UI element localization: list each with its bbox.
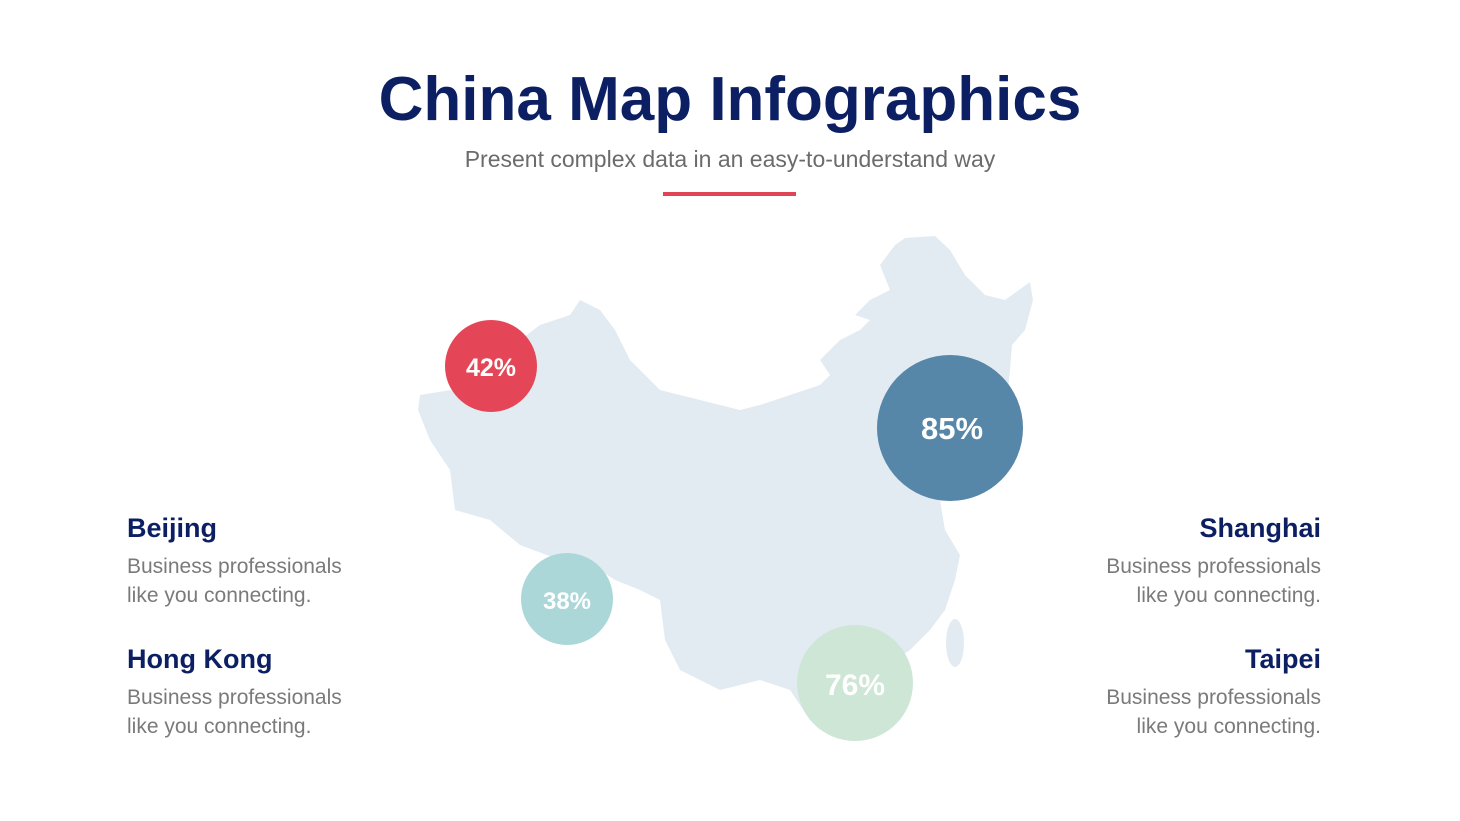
text: Taipei (1106, 644, 1321, 738)
circle 85% (877, 355, 1023, 501)
text: Hong Kong: Business professionals (127, 686, 342, 709)
circle 85%: 85% (921, 411, 983, 446)
text: Beijing (127, 513, 342, 607)
text: Hong Kong: like you connecting. (127, 715, 311, 738)
text: Shanghai (1106, 513, 1321, 607)
text: Taipei: like you connecting. (1137, 715, 1321, 738)
circle 38%: 38% (543, 588, 591, 615)
text: Hong Kong (127, 644, 342, 738)
text: Shanghai: Shanghai (1199, 513, 1321, 543)
circle 42%: 42% (466, 354, 516, 382)
circle 42% (445, 320, 537, 412)
text: Shanghai: Business professionals (1106, 555, 1321, 578)
map: China (418, 236, 1033, 730)
circle 38% (521, 553, 613, 645)
subtitle: Present complex data in an easy-to-understand way (465, 146, 995, 172)
circle 76% (797, 625, 913, 741)
text: Beijing: Beijing (127, 513, 217, 543)
title: China Map Infographics (379, 65, 1081, 134)
text: Shanghai: like you connecting. (1137, 584, 1321, 607)
accent line (663, 192, 796, 196)
text: Taipei: Taipei (1245, 644, 1321, 674)
circle 76%: 76% (825, 669, 885, 702)
text: Taipei: Business professionals (1106, 686, 1321, 709)
text: Beijing: like you connecting. (127, 584, 311, 607)
text: Hong Kong: Hong Kong (127, 644, 272, 674)
text: Beijing: Business professionals (127, 555, 342, 578)
